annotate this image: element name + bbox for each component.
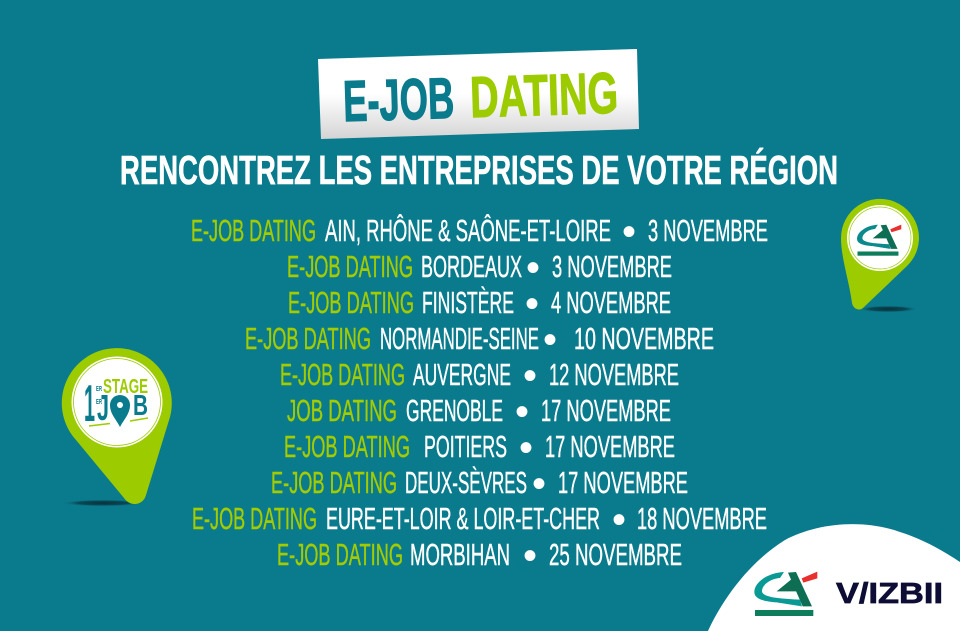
event: Deux-Sèvres bbox=[271, 462, 688, 506]
event: Ain, Rhône & Saône-et-Loire: E-JOB DATING bbox=[191, 213, 316, 248]
event: Finistère: FINISTÈRE bbox=[422, 285, 514, 320]
event: Bordeaux: E-JOB DATING bbox=[287, 249, 413, 284]
pin logo text: 1 bbox=[84, 375, 95, 433]
pin logo text: STAGE bbox=[103, 376, 148, 398]
event: Eure-et-Loir & Loir-et-Cher: EURE-ET-LOIR & LOIR-ET-CHER bbox=[326, 501, 600, 536]
banner title text: E-JOB bbox=[342, 66, 455, 134]
map pin: 1er stage 1er job bbox=[61, 348, 172, 506]
event: Grenoble bbox=[287, 390, 671, 434]
event: Auvergne bbox=[280, 354, 679, 398]
event: Bordeaux: • bbox=[526, 246, 540, 290]
map pin: Crédit Agricole bbox=[841, 199, 919, 312]
event: Normandie-Seine: E-JOB DATING bbox=[245, 321, 371, 356]
event: Bordeaux: BORDEAUX bbox=[421, 249, 522, 284]
title banner bbox=[318, 49, 639, 139]
event: Morbihan: 25 NOVEMBRE bbox=[549, 537, 682, 572]
event: Finistère: 4 NOVEMBRE bbox=[551, 285, 671, 320]
event: Deux-Sèvres: 17 NOVEMBRE bbox=[558, 465, 688, 500]
event: Deux-Sèvres: • bbox=[532, 462, 546, 506]
banner title text: DATING bbox=[469, 61, 619, 130]
event: Poitiers: • bbox=[519, 426, 533, 470]
event: Eure-et-Loir & Loir-et-Cher: 18 NOVEMBRE bbox=[637, 501, 767, 536]
event: Eure-et-Loir & Loir-et-Cher: E-JOB DATING bbox=[192, 501, 317, 536]
pin logo text: ER bbox=[96, 386, 102, 393]
event: Normandie-Seine: • bbox=[543, 318, 557, 362]
event: Poitiers: E-JOB DATING bbox=[284, 429, 410, 464]
event: Ain, Rhône & Saône-et-Loire: • bbox=[622, 210, 636, 254]
event: Auvergne: • bbox=[523, 354, 537, 398]
event: Eure-et-Loir & Loir-et-Cher: • bbox=[612, 498, 626, 542]
pin logo text: ER bbox=[96, 399, 102, 406]
location marker bbox=[110, 395, 130, 427]
event: Finistère bbox=[288, 282, 671, 326]
event: Morbihan: MORBIHAN bbox=[410, 537, 510, 572]
event: Ain, Rhône & Saône-et-Loire: 3 NOVEMBRE bbox=[648, 213, 768, 248]
event: Ain, Rhône & Saône-et-Loire: AIN, RHÔNE & SAÔNE-ET-LOIRE bbox=[325, 213, 611, 248]
event: Ain, Rhône & Saône-et-Loire bbox=[191, 210, 768, 254]
pin logo text bbox=[84, 375, 148, 433]
event: Poitiers bbox=[284, 426, 675, 470]
bottom corner panel bbox=[708, 524, 960, 631]
event: Poitiers: 17 NOVEMBRE bbox=[545, 429, 675, 464]
event: Morbihan bbox=[277, 534, 682, 578]
event: Normandie-Seine: 10 NOVEMBRE bbox=[574, 321, 714, 356]
event: Deux-Sèvres: E-JOB DATING bbox=[271, 465, 397, 500]
Crédit Agricole mark bbox=[857, 225, 901, 256]
event: Eure-et-Loir & Loir-et-Cher bbox=[192, 498, 767, 542]
banner title text bbox=[342, 61, 619, 134]
event list bbox=[191, 210, 768, 578]
event: Bordeaux bbox=[287, 246, 672, 290]
event: Auvergne: E-JOB DATING bbox=[280, 357, 405, 392]
event: Bordeaux: 3 NOVEMBRE bbox=[552, 249, 672, 284]
event: Auvergne: 12 NOVEMBRE bbox=[549, 357, 679, 392]
event: Grenoble: GRENOBLE bbox=[406, 393, 503, 428]
event: Deux-Sèvres: DEUX-SÈVRES bbox=[405, 465, 527, 500]
event: Grenoble: 17 NOVEMBRE bbox=[541, 393, 671, 428]
event: Auvergne: AUVERGNE bbox=[413, 357, 511, 392]
event: Grenoble: JOB DATING bbox=[287, 393, 397, 428]
pin logo text: B bbox=[133, 390, 148, 422]
Crédit Agricole logo bbox=[754, 572, 817, 616]
event: Finistère: • bbox=[525, 282, 539, 326]
event: Morbihan: • bbox=[523, 534, 537, 578]
pin logo text: J bbox=[97, 387, 109, 428]
event: Normandie-Seine: NORMANDIE-SEINE bbox=[380, 321, 539, 356]
event: Poitiers: POITIERS bbox=[424, 429, 507, 464]
event: Normandie-Seine bbox=[245, 318, 714, 362]
event: Morbihan: E-JOB DATING bbox=[277, 537, 403, 572]
event: Finistère: E-JOB DATING bbox=[288, 285, 414, 320]
event: Grenoble: • bbox=[515, 390, 529, 434]
WIZBII logo: V/IZBII bbox=[836, 578, 943, 610]
